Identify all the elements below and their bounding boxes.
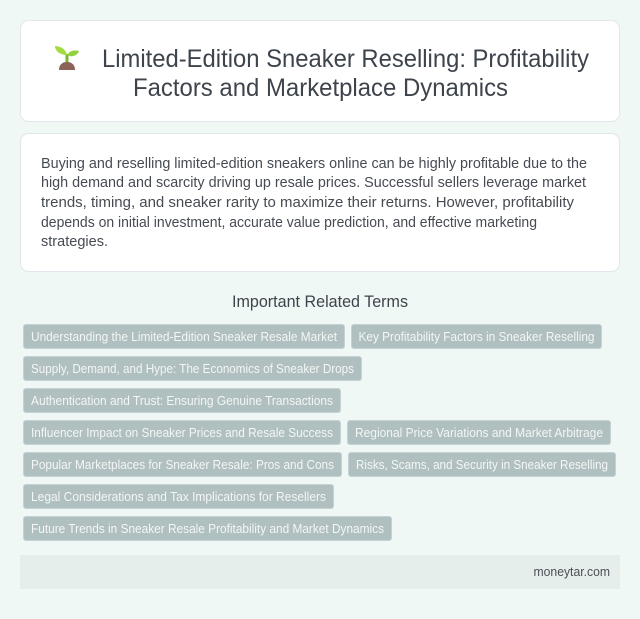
footer bbox=[20, 555, 620, 589]
title bbox=[102, 45, 589, 102]
heading: important related terms: Important Related Terms bbox=[232, 293, 408, 311]
title: Factors and Marketplace Dynamics bbox=[133, 74, 508, 102]
text block: introduction bbox=[41, 156, 587, 250]
text block: introduction: Buying and reselling limited-edition sneakers online can be highly profitable due to the bbox=[41, 156, 587, 172]
footer source: moneytar.com bbox=[534, 564, 610, 579]
tag: profitability factors: Key Profitability Factors in Sneaker Reselling bbox=[358, 329, 594, 344]
panel: title card bbox=[20, 20, 620, 122]
tag: authentication: Authentication and Trust: Ensuring Genuine Transactions bbox=[31, 393, 333, 408]
icon: seedling bbox=[55, 46, 79, 70]
tag: popular marketplaces bbox=[24, 452, 342, 476]
tag: regional price variations: Regional Price Variations and Market Arbitrage bbox=[355, 425, 603, 440]
tag: influencer impact: Influencer Impact on Sneaker Prices and Resale Success bbox=[31, 425, 333, 440]
tag: authentication bbox=[24, 388, 340, 412]
tag: risks and scams bbox=[348, 452, 616, 476]
tag: future trends bbox=[24, 516, 392, 540]
tag: future trends: Future Trends in Sneaker Resale Profitability and Market Dynamics bbox=[31, 521, 384, 536]
text block: introduction: depends on initial investment, accurate value prediction, and effective marketing bbox=[41, 215, 537, 231]
tag: regional price variations bbox=[348, 420, 610, 444]
tag: popular marketplaces: Popular Marketplaces for Sneaker Resale: Pros and Cons bbox=[31, 457, 334, 472]
panel: introduction bbox=[20, 134, 620, 272]
tag: legal and tax: Legal Considerations and Tax Implications for Resellers bbox=[31, 489, 326, 504]
tag: resale market bbox=[24, 324, 344, 348]
tag: resale market: Understanding the Limited-Edition Sneaker Resale Market bbox=[31, 329, 337, 344]
text block: introduction: high demand and scarcity driving up resale prices. Successful sellers leverage market bbox=[41, 175, 586, 191]
tag: influencer impact bbox=[24, 420, 340, 444]
tag: profitability factors bbox=[352, 324, 602, 348]
tag: risks and scams: Risks, Scams, and Security in Sneaker Reselling bbox=[356, 457, 608, 472]
text block: introduction: trends, timing, and sneaker rarity to maximize their returns. However, profitability bbox=[41, 195, 575, 211]
tag: supply and demand bbox=[24, 356, 362, 380]
text block: introduction: strategies. bbox=[41, 234, 108, 250]
tag: supply and demand: Supply, Demand, and Hype: The Economics of Sneaker Drops bbox=[31, 361, 354, 376]
title: Limited-Edition Sneaker Reselling: Profitability bbox=[102, 45, 589, 73]
tag: legal and tax bbox=[24, 484, 334, 508]
